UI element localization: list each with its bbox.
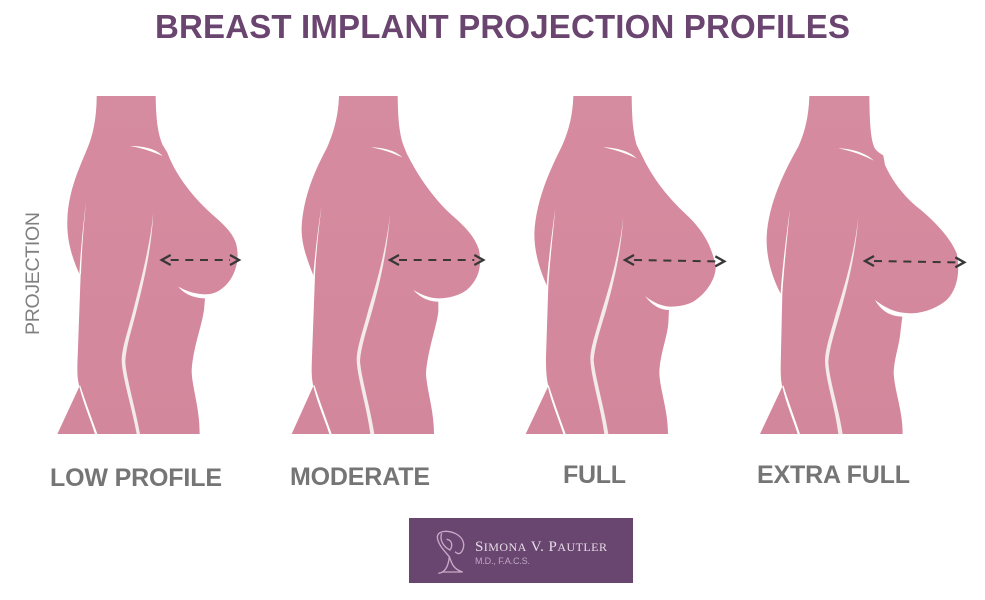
figure: full (526, 96, 724, 434)
figure: moderate (292, 96, 483, 434)
logo credentials: M.D., F.A.C.S. (475, 556, 530, 566)
back line (547, 208, 555, 285)
logo icon: head profile (437, 531, 464, 573)
figure: low profile (57, 96, 239, 434)
arm line (122, 213, 153, 434)
hip line (548, 385, 566, 434)
back line (79, 202, 86, 274)
torso silhouette (292, 96, 480, 434)
label: extra full: EXTRA FULL (757, 461, 910, 489)
hip line (313, 385, 332, 434)
torso silhouette (760, 96, 958, 434)
back line (781, 208, 790, 294)
projection arrow (390, 255, 483, 265)
arm line (357, 214, 390, 434)
arm line (825, 217, 858, 434)
label: low profile: LOW PROFILE (50, 464, 222, 492)
back line (313, 205, 322, 275)
logo background (409, 518, 633, 583)
label: moderate: MODERATE (290, 463, 430, 491)
clavicle line (130, 146, 163, 156)
clavicle line (838, 148, 874, 161)
torso silhouette (526, 96, 716, 434)
logo name: SIMONA V. PAUTLER (475, 539, 607, 555)
arm line (590, 217, 623, 434)
title: BREAST IMPLANT PROJECTION PROFILES (155, 8, 850, 45)
figure: extra full (760, 96, 964, 434)
torso silhouette (57, 96, 238, 434)
projection arrow (162, 255, 239, 265)
clavicle line (603, 147, 637, 158)
label: full: FULL (563, 461, 626, 489)
hip line (79, 385, 97, 434)
axis label: projection: PROJECTION (22, 212, 44, 335)
projection arrow (625, 255, 724, 266)
logo: simona v. pautler (409, 518, 633, 583)
clavicle line (371, 147, 402, 157)
hip line (782, 385, 800, 434)
projection arrow (865, 256, 964, 267)
